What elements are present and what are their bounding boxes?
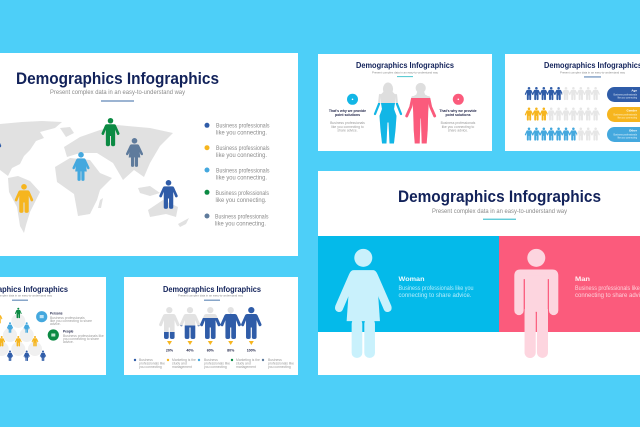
legend — [204, 123, 270, 227]
person: yellow — [15, 184, 33, 213]
legend: Business professionals — [216, 191, 269, 197]
legend: like you connecting. — [215, 221, 266, 227]
item: people: People — [63, 330, 74, 334]
person chart: 40%: 40% — [186, 348, 194, 352]
person chart: 100% — [241, 307, 262, 352]
legend: like you connecting. — [216, 198, 267, 204]
item: persons: Persons — [50, 312, 63, 316]
callout: right — [439, 94, 477, 132]
legend: Business professionals — [216, 146, 270, 152]
callout: left: share advice. — [337, 128, 358, 132]
callout: left: point solutions — [335, 113, 360, 117]
callout: left — [329, 94, 366, 132]
item: people: advice. — [63, 340, 74, 344]
people row: gender — [525, 108, 600, 121]
icon: woman figure — [335, 249, 392, 358]
pill: age — [607, 87, 640, 102]
pyramid backing shapes — [0, 314, 42, 356]
pill: age: Business professionals — [614, 94, 638, 96]
callout: left: like you connecting to — [331, 125, 364, 129]
people row: other — [525, 128, 600, 141]
people row: age — [525, 87, 600, 100]
person chart: 60%: 60% — [207, 348, 215, 352]
text: man — [575, 276, 640, 299]
item: persons — [36, 311, 92, 326]
item: persons: like you connecting to share — [50, 319, 92, 323]
callout: right: Business professionals — [441, 121, 476, 125]
item: people: Business professionals like — [63, 334, 104, 338]
text: woman: Business professionals like you — [398, 285, 474, 292]
pill: age: Age — [631, 88, 637, 92]
pill: other: like you connecting — [617, 136, 638, 140]
legend: percentage slide: management — [172, 365, 192, 369]
callout: left: That's why we provide — [329, 109, 366, 113]
text: woman — [398, 276, 474, 299]
person chart: 20%: 20% — [166, 348, 174, 352]
man silhouette — [407, 83, 435, 143]
band: woman — [318, 236, 499, 332]
subtitle: percentage slide: Present complex data in an easy-to-understand way — [178, 294, 244, 298]
text: woman: connecting to share advice. — [398, 292, 472, 299]
legend: Business professionals — [216, 168, 270, 174]
person chart: 80%: 80% — [227, 348, 235, 352]
person chart: 80% — [220, 307, 241, 352]
legend: percentage slide: professionals like — [139, 362, 165, 366]
text: woman: Woman — [398, 276, 424, 283]
legend: percentage slide: professionals like — [268, 362, 294, 366]
pill: other: Other — [629, 128, 638, 132]
pill: other — [607, 127, 640, 142]
legend: like you connecting. — [216, 175, 267, 181]
pill: age: like you connecting — [617, 96, 638, 100]
subtitle: rows slide: Present complex data in an easy-to-understand way — [560, 70, 626, 74]
legend: percentage slide: you connecting — [139, 365, 162, 369]
item: persons: advice. — [50, 322, 61, 326]
heading: main slide: Demographics Infographics — [398, 188, 601, 206]
legend: percentage slide: Business — [139, 358, 153, 362]
item: persons: Business professionals — [50, 316, 85, 320]
legend: Business professionals — [216, 124, 270, 130]
panel: woman and man slide — [318, 171, 640, 375]
callout: right: point solutions — [445, 113, 471, 117]
callout: left: Business professionals — [330, 121, 365, 125]
person chart: 100%: 100% — [247, 348, 257, 352]
pill: other: Business professionals — [614, 134, 638, 136]
pill: gender — [607, 107, 640, 122]
pill: gender: like you connecting — [617, 116, 638, 120]
panel: body silhouettes slide — [318, 54, 492, 151]
heading: percentage slide: Demographics Infographics — [163, 285, 262, 294]
person: slate — [126, 138, 143, 167]
item: people: you connecting to share — [63, 337, 99, 341]
person: green — [101, 118, 120, 146]
subtitle: silhouettes slide: Present complex data in an easy-to-understand way — [372, 70, 439, 74]
legend: percentage slide: management — [236, 365, 256, 369]
panel: world map slide — [0, 53, 298, 256]
heading: silhouettes slide: Demographics Infographics — [356, 61, 455, 70]
callout: right: share advice. — [448, 128, 468, 132]
legend: percentage slide: study and — [236, 362, 251, 366]
person: navy — [159, 180, 178, 209]
subtitle: main slide: Present complex data in an easy-to-understand way — [432, 209, 567, 215]
text: man: Man — [575, 276, 590, 283]
legend: percentage slide: Business — [204, 358, 218, 362]
subtitle: map slide: Present complex data in an easy-to-understand way — [50, 90, 185, 96]
person chart: 20% — [159, 307, 180, 352]
person: navy left edge — [0, 130, 1, 159]
person chart: 60% — [200, 307, 221, 352]
legend: like you connecting. — [216, 153, 267, 159]
heading: map slide: Demographics Infographics — [16, 70, 219, 88]
legend: percentage slide: Business — [268, 358, 282, 362]
band: man — [499, 236, 640, 332]
legend: percentage slide: professionals like — [204, 362, 230, 366]
person chart: 40% — [180, 307, 200, 352]
legend: like you connecting. — [216, 130, 267, 136]
legend: percentage slide: Marketing is the — [236, 358, 260, 362]
legend: percentage slide — [134, 358, 294, 369]
woman silhouette — [375, 83, 401, 143]
pill: gender: Gender — [626, 108, 638, 112]
legend: Business professionals — [215, 214, 268, 220]
panel: people rows slide — [505, 54, 640, 151]
icon: man figure — [514, 249, 558, 358]
person: light blue — [72, 152, 90, 181]
legend: percentage slide: study and — [172, 362, 187, 366]
callout: right: That's why we provide — [439, 109, 477, 113]
pyramid people — [0, 308, 46, 361]
world map — [0, 121, 189, 233]
legend: percentage slide: Marketing is the — [172, 358, 196, 362]
pill: gender: Business professionals — [614, 114, 638, 116]
legend: percentage slide: you connecting — [204, 365, 227, 369]
panel: percentage people slide — [124, 277, 298, 375]
item: people — [48, 329, 104, 344]
callout: right: like you connecting to — [442, 125, 474, 129]
legend: percentage slide: you connecting — [268, 365, 291, 369]
panel: people pyramid slide — [0, 277, 106, 375]
